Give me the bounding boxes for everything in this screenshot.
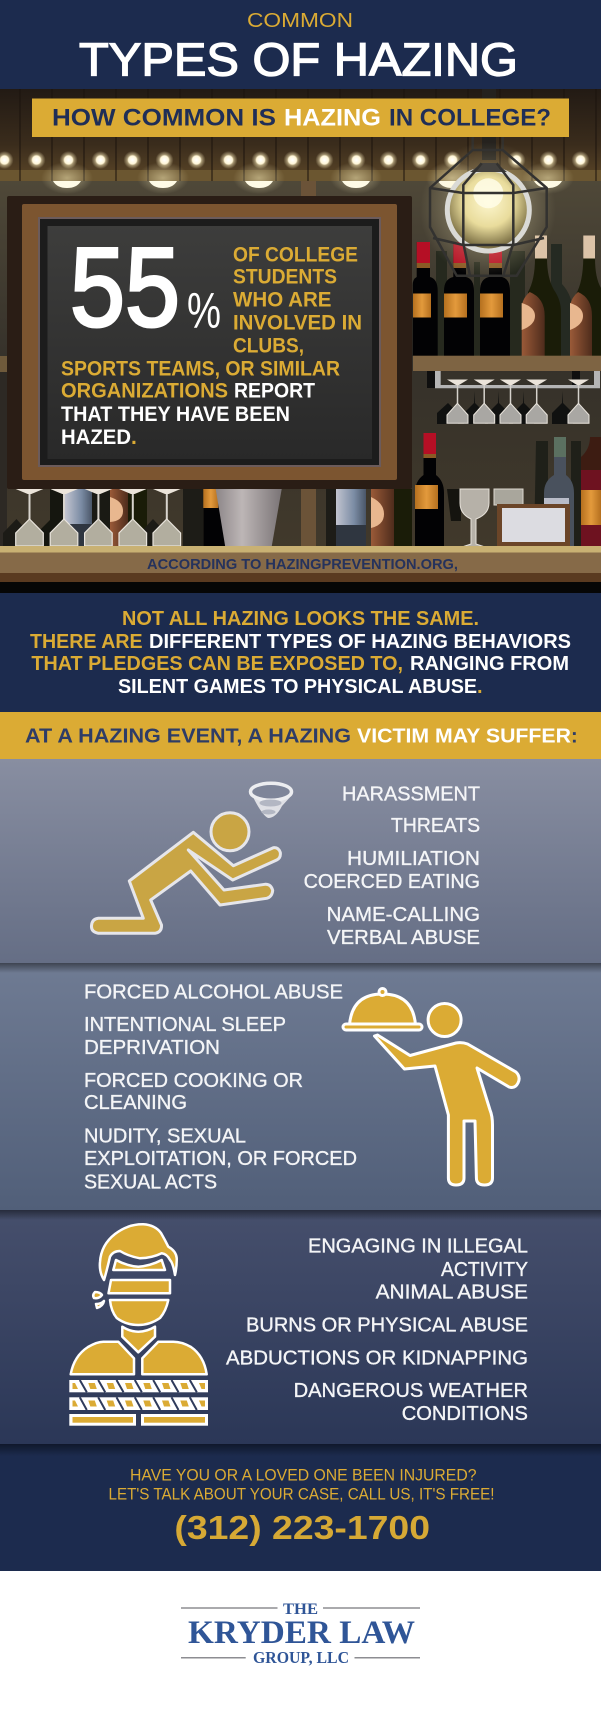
panel: forced acts: [0, 963, 601, 1210]
list: verbal harassment items: NAME-CALLING: [327, 903, 480, 926]
icon: crawling person: [91, 813, 280, 933]
header banner: [0, 0, 601, 89]
list: verbal harassment items: [304, 782, 480, 949]
panel: physical abuse: [0, 1210, 601, 1444]
yellow question banner: HAZING: [284, 105, 381, 132]
intro text panel: [0, 593, 601, 712]
intro text panel: .: [477, 676, 483, 698]
statistic text: CLUBS,: [233, 335, 304, 358]
victim heading banner: VICTIM MAY SUFFER: [357, 725, 572, 747]
yellow question banner: IN COLLEGE?: [389, 105, 551, 132]
statistic text: WHO ARE: [233, 289, 332, 312]
intro text panel: NOT ALL HAZING LOOKS THE SAME.: [122, 608, 479, 630]
list: forced acts items: SEXUAL ACTS: [84, 1171, 217, 1194]
list: physical abuse items: BURNS OR PHYSICAL ABUSE: [246, 1314, 528, 1337]
law firm logo: KRYDER LAW: [188, 1615, 415, 1651]
list: physical abuse items: ANIMAL ABUSE: [376, 1281, 528, 1304]
statistic text: [61, 243, 362, 449]
law firm logo: [0, 1571, 601, 1711]
big number 55: 55: [70, 225, 180, 350]
phone number: (312) 223-1700: [174, 1509, 430, 1546]
hanging lamp: [420, 89, 556, 278]
bar scene illustration: [0, 89, 601, 593]
list: forced acts items: [84, 980, 357, 1194]
icon: blindfolded tied person: [69, 1224, 208, 1426]
icon: dizzy swirl: [250, 783, 292, 818]
yellow question banner: HOW COMMON IS: [52, 105, 276, 132]
list: forced acts items: FORCED COOKING OR: [84, 1069, 303, 1092]
rope: [69, 1380, 208, 1426]
statistic text: STUDENTS: [233, 266, 337, 289]
string lights: [0, 151, 590, 194]
call to action panel: LET'S TALK ABOUT YOUR CASE, CALL US, IT'S FREE!: [108, 1485, 494, 1503]
statistic text: HAZED: [61, 426, 131, 449]
ice bucket: [216, 489, 282, 546]
list: physical abuse items: ABDUCTIONS OR KIDNAPPING: [226, 1347, 528, 1370]
list: physical abuse items: CONDITIONS: [402, 1402, 528, 1425]
intro text panel: THERE ARE: [30, 631, 143, 653]
victim heading banner: AT A HAZING EVENT, A HAZING: [25, 725, 351, 747]
call to action panel: HAVE YOU OR A LOVED ONE BEEN INJURED?: [130, 1467, 476, 1485]
list: forced acts items: EXPLOITATION, OR FORCED: [84, 1147, 357, 1170]
law firm logo: GROUP, LLC: [253, 1648, 349, 1667]
list: verbal harassment items: HUMILIATION: [347, 847, 480, 870]
left bottles behind the glasses: [50, 489, 412, 546]
victim heading banner: :: [571, 725, 578, 747]
percent sign: %: [187, 282, 221, 338]
list: forced acts items: FORCED ALCOHOL ABUSE: [84, 980, 343, 1003]
left wine glasses: [3, 489, 181, 546]
yellow question banner: [32, 98, 569, 137]
list: verbal harassment items: VERBAL ABUSE: [327, 926, 480, 949]
subtitle: common: COMMON: [247, 10, 353, 32]
call to action panel: [0, 1444, 601, 1571]
list: physical abuse items: ENGAGING IN ILLEGAL: [308, 1235, 528, 1258]
title: TYPES OF HAZING: [79, 34, 518, 86]
chalkboard statistic panel: [7, 196, 412, 489]
statistic text: THAT THEY HAVE BEEN: [61, 403, 290, 426]
glass rack: [427, 371, 600, 424]
list: physical abuse items: DANGEROUS WEATHER: [294, 1379, 528, 1402]
lower right bottles: [415, 433, 601, 547]
list: forced acts items: NUDITY, SEXUAL: [84, 1124, 246, 1147]
law firm logo: THE: [283, 1601, 318, 1618]
list: verbal harassment items: THREATS: [391, 814, 480, 837]
statistic text: .: [131, 426, 137, 449]
source caption: ACCORDING TO HAZINGPREVENTION.ORG,: [147, 556, 458, 573]
list: physical abuse items: ACTIVITY: [441, 1258, 528, 1281]
list: forced acts items: DEPRIVATION: [84, 1036, 220, 1059]
top shelf bottles: [413, 236, 601, 356]
panel: verbal harassment: [0, 759, 601, 963]
list: verbal harassment items: COERCED EATING: [304, 870, 480, 893]
statistic text: OF COLLEGE: [233, 243, 358, 266]
counter: [0, 546, 601, 593]
intro text panel: SILENT GAMES TO PHYSICAL ABUSE: [118, 676, 477, 698]
intro text panel: RANGING FROM: [410, 653, 569, 675]
statistic text: INVOLVED IN: [233, 312, 362, 335]
list: physical abuse items: [226, 1235, 528, 1425]
icon: waiter carrying cloche: [343, 988, 519, 1185]
statistic text: ORGANIZATIONS: [61, 380, 228, 402]
statistic text: REPORT: [234, 380, 315, 402]
list: forced acts items: INTENTIONAL SLEEP: [84, 1013, 286, 1036]
upright glasses and sign: [447, 489, 570, 547]
shelf: [413, 356, 601, 371]
intro text panel: THAT PLEDGES CAN BE EXPOSED TO,: [31, 653, 403, 675]
statistic text: SPORTS TEAMS, OR SIMILAR: [61, 358, 340, 381]
intro text panel: DIFFERENT TYPES OF HAZING BEHAVIORS: [149, 631, 571, 653]
victim heading banner: [0, 712, 601, 759]
list: verbal harassment items: HARASSMENT: [342, 782, 480, 805]
list: forced acts items: CLEANING: [84, 1091, 187, 1114]
